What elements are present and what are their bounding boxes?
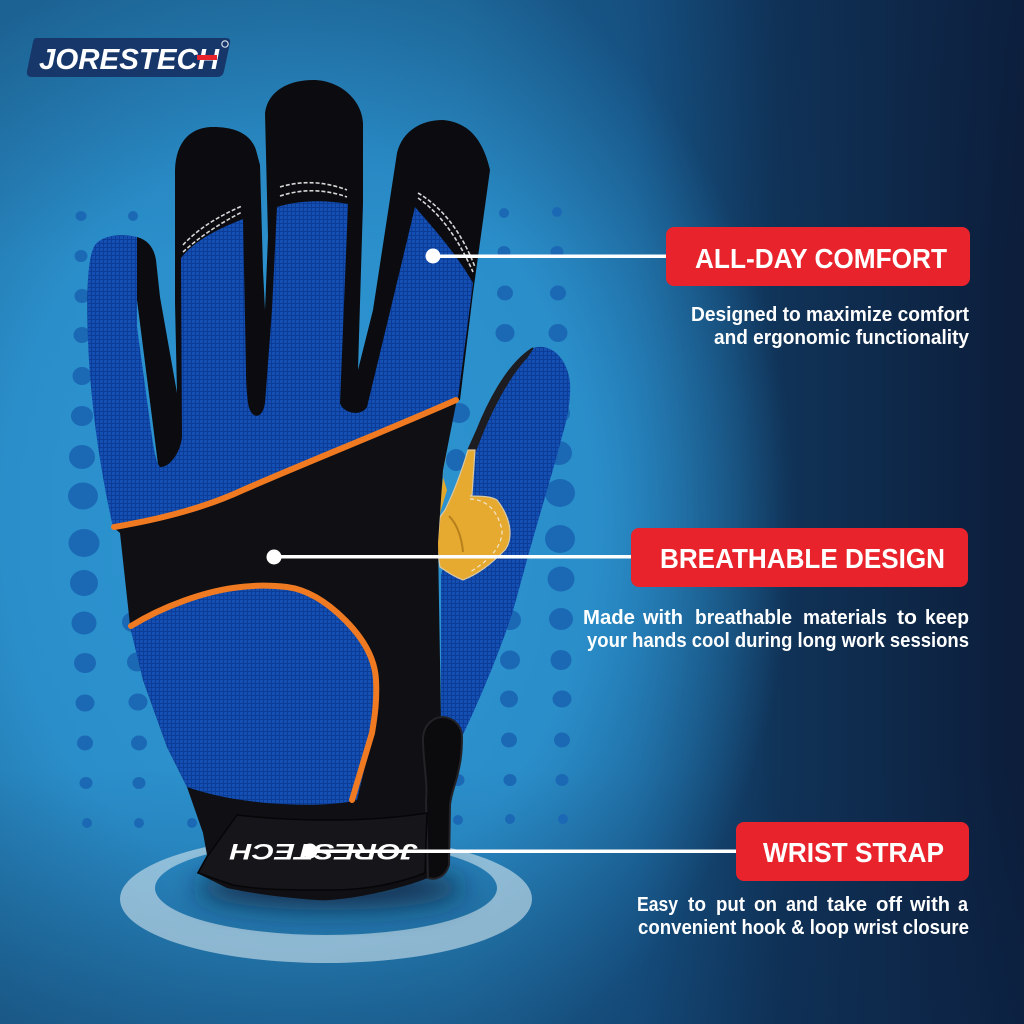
description: with: [642, 607, 683, 629]
red heading badge: BREATHABLE DESIGN: [660, 543, 945, 574]
description: [691, 304, 970, 349]
blue knit lower pad: [130, 586, 377, 805]
wrist strap label: JORESTECH: [228, 839, 418, 864]
red heading badge: [666, 227, 970, 286]
description: your hands cool during long work sessions: [587, 630, 969, 652]
thumb: [437, 347, 570, 745]
red heading badge: ALL-DAY COMFORT: [695, 243, 947, 274]
pointer line: [266, 550, 634, 564]
description: materials: [803, 607, 887, 629]
glove: [87, 80, 570, 900]
description: Designed to maximize comfort: [691, 304, 969, 326]
pointer line: [426, 248, 673, 264]
orange piping: [114, 400, 456, 800]
description: keep: [925, 607, 969, 629]
red heading badge: [631, 528, 968, 587]
description: Easy: [637, 894, 679, 916]
description: a: [958, 894, 969, 916]
description: to: [688, 894, 706, 916]
pointer line: [302, 844, 740, 858]
black centre panel and cuff: [113, 399, 462, 900]
callout: breathable design: [266, 528, 969, 652]
description: breathable: [695, 607, 792, 629]
description: with: [909, 894, 950, 916]
description: convenient hook & loop wrist closure: [638, 917, 969, 939]
description: put: [716, 894, 745, 916]
callout: wrist strap: [302, 822, 969, 939]
wrist loop tab: [423, 717, 462, 879]
description: and: [786, 894, 818, 916]
description: [637, 894, 969, 939]
red heading badge: WRIST STRAP: [763, 837, 944, 868]
description: take: [827, 894, 867, 916]
description: [583, 607, 969, 652]
blue knit upper hand: [87, 201, 473, 527]
red heading badge: [736, 822, 969, 881]
halftone dot pattern: [68, 207, 575, 828]
description: to: [897, 607, 917, 629]
logo: JORESTECH: [39, 44, 220, 76]
description: on: [754, 894, 777, 916]
black fingers and palm backing: [137, 80, 490, 480]
wrist strap label: [198, 813, 427, 890]
description: off: [876, 894, 902, 916]
callout: all-day comfort: [426, 227, 970, 349]
stitching: [183, 183, 475, 272]
pedestal ring: [120, 835, 532, 963]
description: and ergonomic functionality: [714, 327, 970, 349]
description: Made: [583, 607, 635, 629]
glove shadow: [195, 866, 465, 910]
